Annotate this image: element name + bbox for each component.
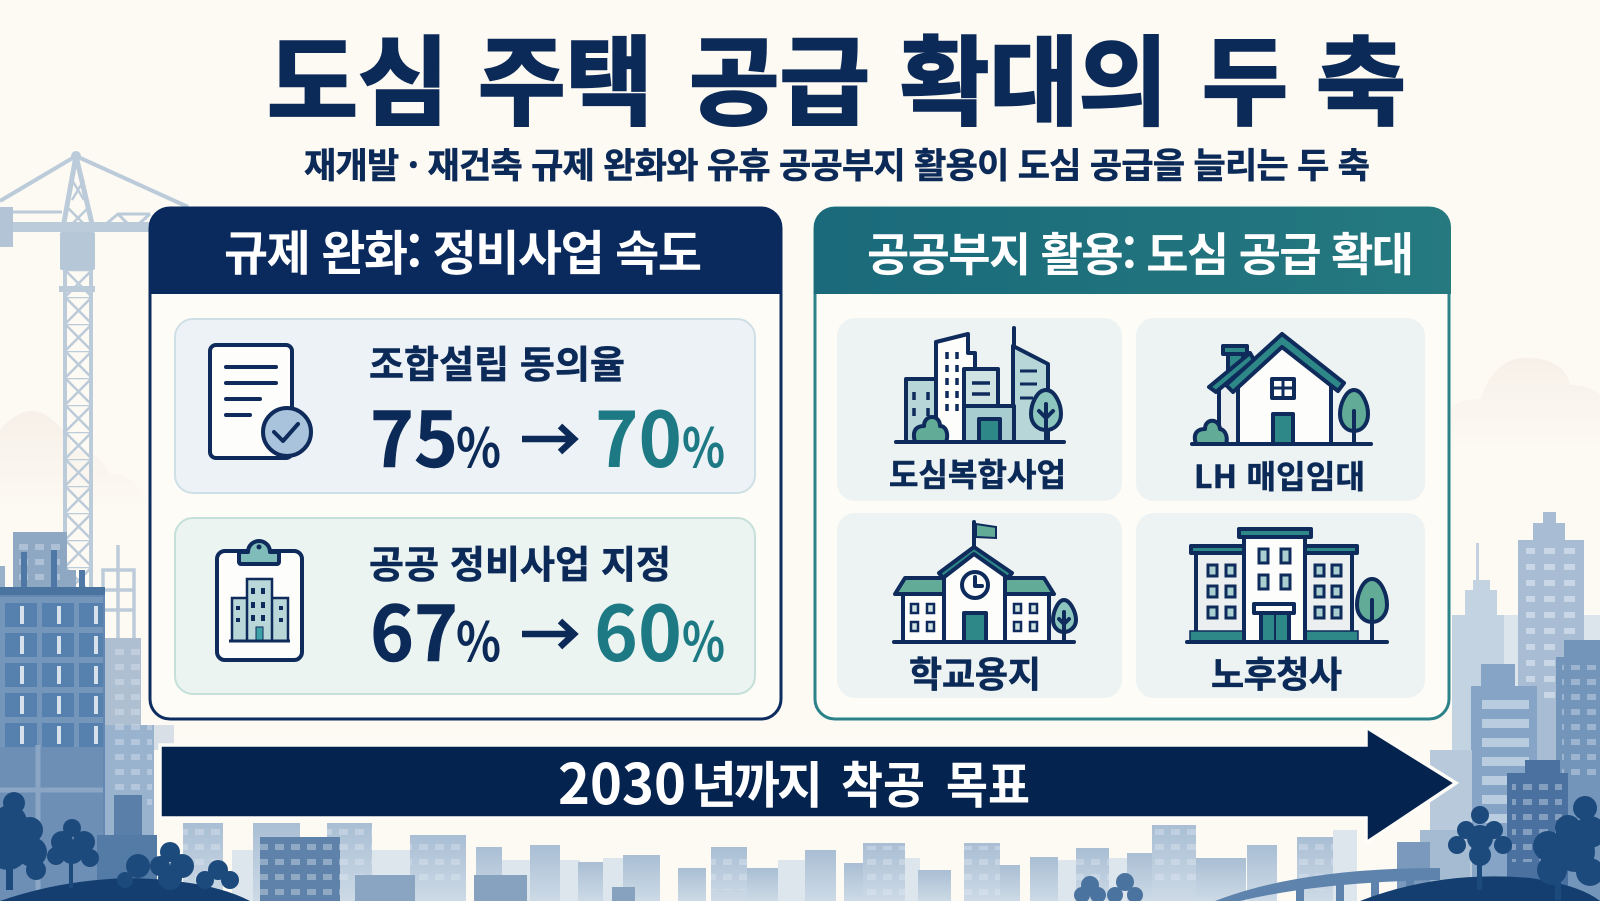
arrow: 2030 target [160,727,1456,843]
card label: 학교용지 [909,646,1041,698]
title: 주택 [478,4,653,145]
panel header [814,207,1451,294]
icon: clipboard with building [217,541,302,660]
left skyline [0,532,174,901]
icon: house [1192,334,1371,444]
card: aging government building [1136,513,1425,698]
label: 공공 정비사업 지정 [369,534,671,589]
title [267,4,1406,145]
card: public designation [175,518,755,694]
values: 75 [370,379,458,489]
panel heading: 공공부지 활용: 도심 공급 확대 [867,219,1414,285]
panel: regulatory easing [149,207,782,719]
values: % [682,598,725,677]
panel: public land use [814,207,1451,719]
arrow label: 목표 [946,746,1030,818]
bottom skyline [183,823,1357,901]
title: 도심 [267,4,449,145]
subtitle: 재개발 · 재건축 규제 완화와 유휴 공공부지 활용이 도심 공급을 늘리는 두 축 [304,138,1370,189]
card label: 도심복합사업 [889,450,1066,496]
panel body [150,208,781,719]
values: % [456,404,501,483]
values: 60 [594,573,682,683]
values: 67 [370,573,458,683]
title: 축 [1316,4,1406,145]
title: 공급 [689,4,870,145]
arrow label [558,740,1030,821]
title: 확대의 [900,4,1168,145]
card: school site [837,513,1122,698]
values: % [456,598,501,677]
label: 조합설립 동의율 [369,334,625,389]
card label: LH 매입임대 [1194,452,1365,498]
arrow label: 2030 [558,740,686,821]
crane [0,151,188,610]
arrow label: 년까지 [691,746,823,818]
values: 70 [595,379,682,489]
card: urban complex project [837,318,1122,501]
panel body [815,208,1449,719]
icon: city buildings [896,328,1064,442]
values: % [682,404,725,483]
panel header [149,207,782,294]
clouds [0,358,1600,510]
icon: office building [1187,529,1387,642]
values [370,379,725,489]
card: union consent [175,319,755,493]
values [370,573,725,683]
right skyline [1397,512,1600,901]
card: LH purchased rental [1136,318,1425,501]
title: 두 [1202,4,1288,145]
bridge [1215,868,1440,901]
icon: school [894,522,1076,642]
arrow label: 착공 [841,746,925,818]
panel heading: 규제 완화: 정비사업 속도 [224,214,702,284]
trees and hills [0,792,1600,901]
icon: document with check [210,345,311,458]
card label: 노후청사 [1211,646,1342,698]
